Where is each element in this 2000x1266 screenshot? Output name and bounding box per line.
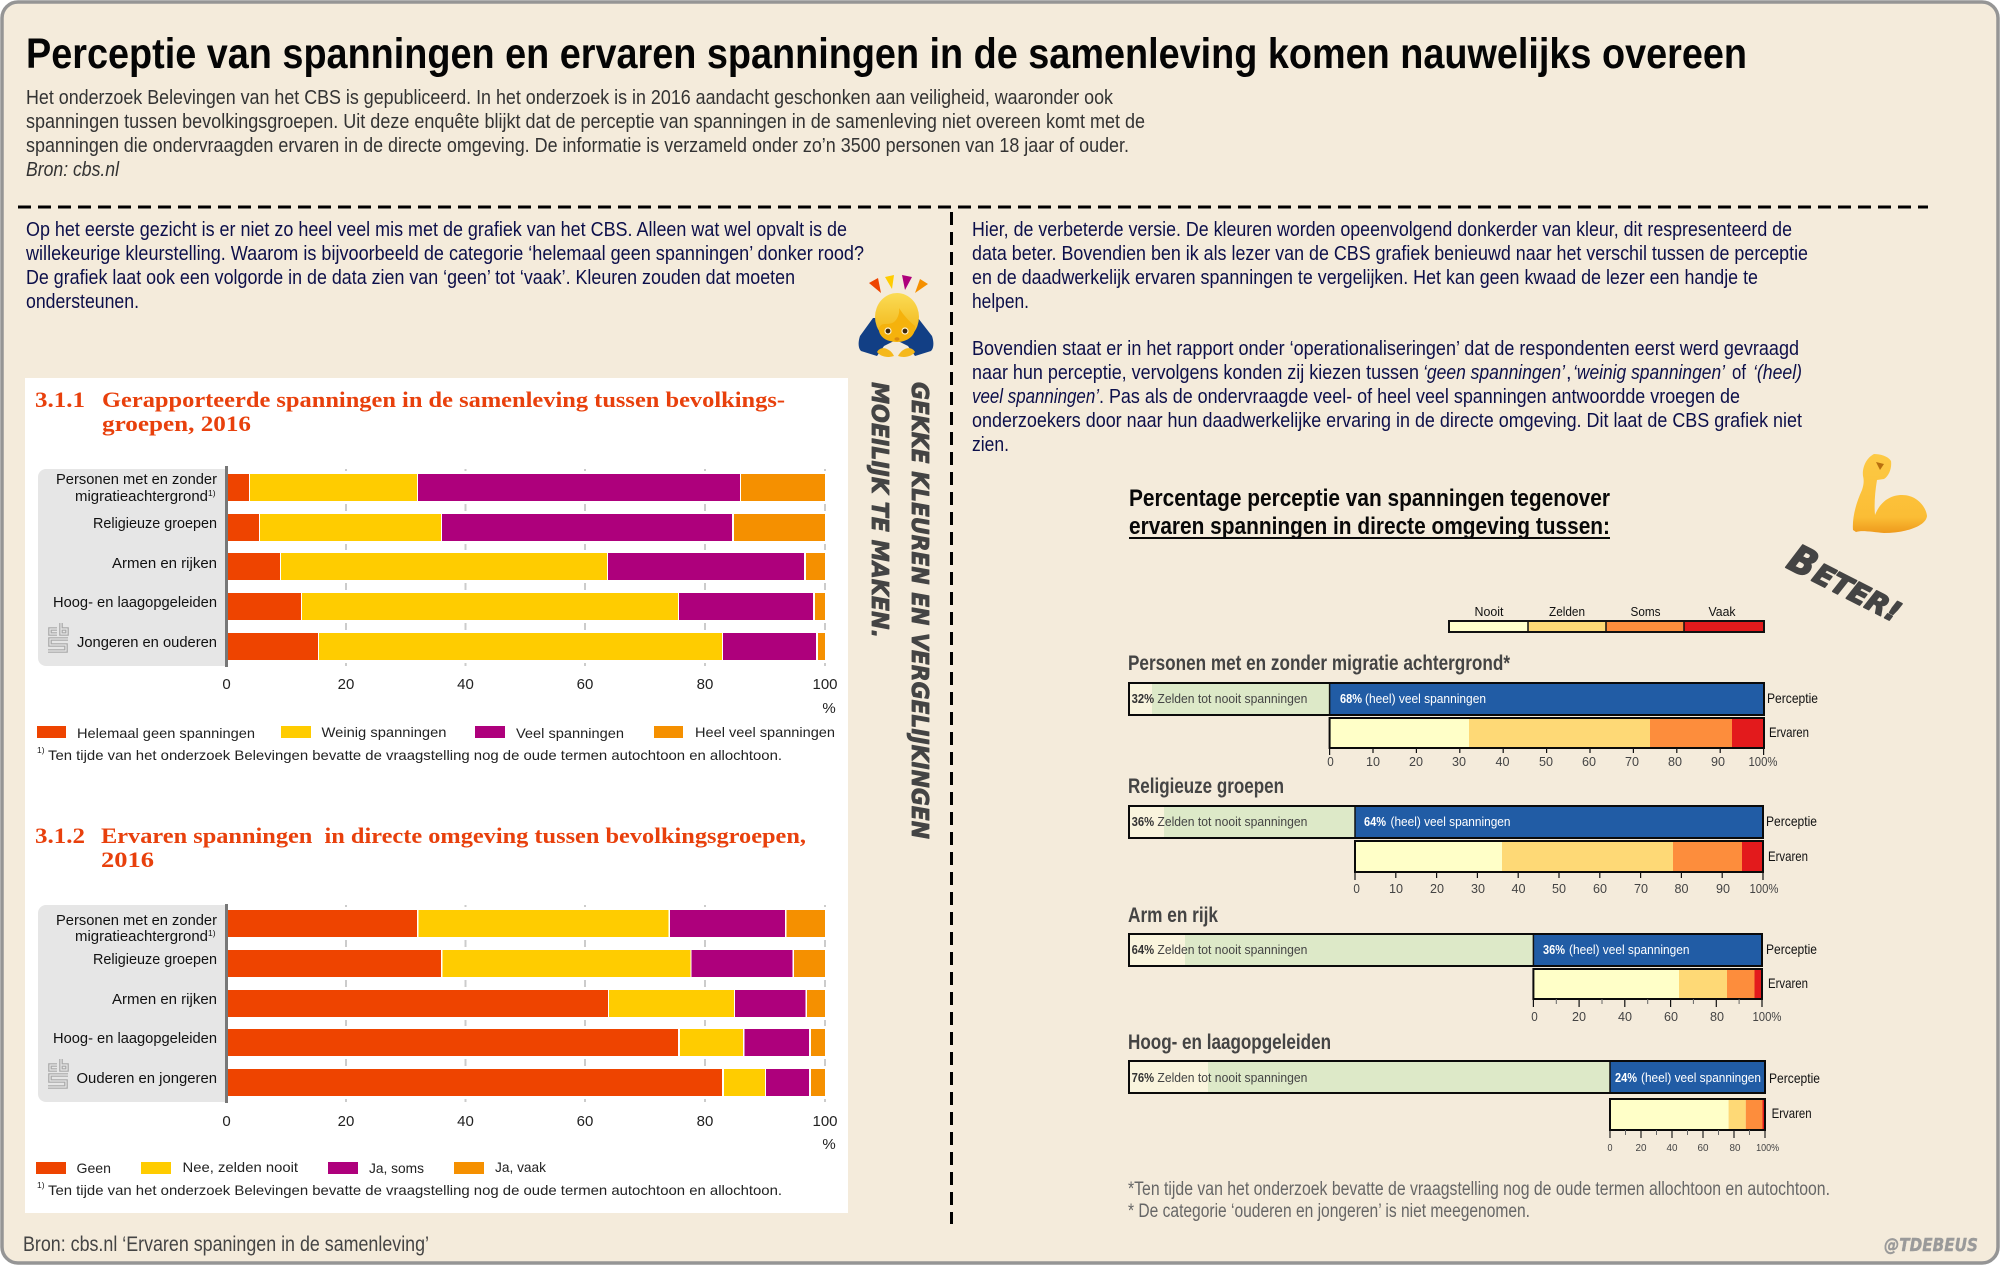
axis labels: 20: [338, 1113, 354, 1130]
perception bar: 36%: [1132, 814, 1154, 829]
legend: [36, 1159, 547, 1176]
axis: 0: [1327, 754, 1334, 769]
axis labels: 80: [697, 676, 713, 693]
axis: 100%: [1748, 754, 1778, 769]
handwritten note: Beter: ETER!: [1808, 557, 1906, 629]
perception bar: [1129, 1061, 1765, 1093]
category labels: Hoog- en laagopgeleiden: [53, 595, 217, 611]
legend: Weinig spanningen: [322, 724, 446, 740]
legend: Geen: [76, 1160, 111, 1176]
legend: Heel veel spanningen: [695, 724, 835, 740]
intro text block: Het onderzoek Belevingen van het CBS is gepubliceerd. In het onderzoek is in 2016 aandacht geschonken aan veiligheid, waaronder ook: [26, 87, 1114, 109]
axis: [1353, 872, 1779, 896]
section heading: Hoog- en laagopgeleiden: [1128, 1031, 1331, 1054]
panel: migratie achtergrond: [1128, 652, 1818, 769]
axis: 80: [1730, 1142, 1741, 1154]
heading 3.1.2: [35, 823, 806, 872]
footnote: 1): [37, 745, 45, 755]
panel: religieuze groepen: [1128, 775, 1817, 896]
left explanation text: [25, 219, 864, 313]
axis: 0: [1531, 1009, 1538, 1024]
axis labels: 60: [577, 676, 593, 693]
axis labels: 40: [457, 1113, 474, 1130]
category label panel: [38, 469, 226, 666]
experienced bar: [1533, 969, 1762, 999]
footnote: Ten tijde van het onderzoek Belevingen bevatte de vraagstelling nog de oude termen autochtoon en allochtoon.: [48, 747, 782, 763]
handwritten vertical note: MOEILIJK TE MAKEN.: [866, 382, 892, 638]
perception bar: [1129, 683, 1764, 715]
axis: 100%: [1752, 1009, 1782, 1024]
right explanation text: onderzoekers door naar hun daadwerkelijke ervaring in de directe omgeving. Dit laat de CBS grafiek niet: [972, 410, 1802, 432]
axis: 80: [1668, 754, 1682, 769]
axis: 60: [1582, 754, 1596, 769]
left explanation text: Op het eerste gezicht is er niet zo heel veel mis met de grafiek van het CBS. Alleen wat wel opvalt is de: [26, 219, 847, 241]
axis: 30: [1452, 754, 1466, 769]
perception bar: 36%: [1543, 942, 1565, 957]
experienced bar: [1610, 1099, 1765, 1130]
right explanation text: . Pas als de ondervraagde veel- of heel veel spanningen antwoordde vroegen de: [1099, 386, 1740, 408]
axis labels: 100: [812, 1113, 838, 1130]
category labels: 1): [208, 488, 216, 498]
axis labels: %: [822, 1136, 836, 1153]
axis labels: [222, 676, 838, 717]
axis: 60: [1593, 881, 1607, 896]
label: Ervaren: Ervaren: [1769, 724, 1809, 740]
intro text block: spanningen die ondervraagden ervaren in de directe omgeving. De informatie is verzameld onder zo’n 3500 personen van 18 jaar of ouder.: [26, 135, 1129, 157]
label: Ervaren: Ervaren: [1768, 975, 1808, 991]
axis: [1608, 1130, 1779, 1154]
category labels: [53, 472, 217, 651]
right explanation text: of: [1732, 362, 1746, 384]
colour legend: Vaak: [1708, 604, 1736, 619]
axis: 0: [1608, 1142, 1613, 1154]
axis: 20: [1572, 1009, 1586, 1024]
heading 3.1.1: 3.1.1: [35, 387, 85, 412]
category labels: Religieuze groepen: [93, 516, 217, 532]
axis labels: %: [822, 700, 836, 717]
label: Perceptie: Perceptie: [1767, 690, 1818, 706]
left explanation text: willekeurige kleurstelling. Waarom is bijvoorbeeld de categorie ‘helemaal geen spanningen’ donker rood?: [25, 243, 864, 265]
perception bar: 32%: [1132, 691, 1154, 706]
right explanation text: ‘geen spanningen’: [1423, 362, 1565, 384]
category labels: migratieachtergrond: [75, 929, 208, 945]
handwritten note: Beter: B: [1781, 536, 1825, 587]
axis: 90: [1711, 754, 1725, 769]
axis: 100%: [1756, 1142, 1779, 1154]
right explanation text: Hier, de verbeterde versie. De kleuren worden opeenvolgend donkerder van kleur, dit respresenteerd de: [972, 219, 1792, 241]
handwritten vertical note: GEKKE KLEUREN EN VERGELIJKINGEN: [906, 382, 932, 839]
axis: 40: [1496, 754, 1510, 769]
axis labels: 20: [338, 676, 354, 693]
axis labels: 80: [697, 1113, 713, 1130]
category labels: Hoog- en laagopgeleiden: [53, 1031, 217, 1047]
right explanation text: Bovendien staat er in het rapport onder ‘operationaliseringen’ dat de respondenten eerst werd gevraagd: [972, 338, 1799, 360]
stacked bars: [227, 907, 827, 1099]
axis: 20: [1636, 1142, 1647, 1154]
perception bar: [1129, 934, 1762, 966]
category labels: Ouderen en jongeren: [76, 1071, 217, 1087]
axis labels: 0: [222, 1113, 231, 1130]
handwritten note: Beter: [1781, 536, 1910, 631]
colour legend: Soms: [1630, 604, 1661, 619]
axis: 10: [1389, 881, 1403, 896]
chart heading: ervaren spanningen in directe omgeving tussen:: [1129, 513, 1610, 540]
heading 3.1.1: groepen, 2016: [102, 411, 251, 436]
stacked bars: [227, 471, 827, 663]
section heading: Arm en rijk: [1128, 904, 1218, 927]
label: Perceptie: Perceptie: [1766, 813, 1817, 829]
right explanation text: zien.: [972, 434, 1009, 456]
legend: [37, 724, 835, 741]
heading 3.1.2: 3.1.2: [35, 823, 85, 848]
signature: @TDEBEUS: [1884, 1235, 1978, 1256]
category labels: Personen met en zonder: [56, 913, 217, 929]
perception bar: (heel) veel spanningen: [1641, 1070, 1761, 1085]
colour legend: [1449, 604, 1764, 632]
axis labels: [222, 1113, 838, 1153]
right explanation text: ‘weinig spanningen’: [1573, 362, 1725, 384]
intro text block: [26, 87, 1145, 181]
axis: 20: [1430, 881, 1444, 896]
legend: Ja, vaak: [495, 1159, 547, 1175]
handwritten vertical note: [866, 382, 932, 839]
axis: 20: [1409, 754, 1423, 769]
panel: hoog- en laagopgeleiden: [1128, 1031, 1820, 1154]
axis: 40: [1666, 1142, 1678, 1154]
footnote: 1): [37, 1180, 45, 1190]
category labels: Religieuze groepen: [93, 952, 217, 968]
category labels: Armen en rijken: [112, 992, 217, 1008]
axis: 60: [1664, 1009, 1678, 1024]
axis labels: 100: [812, 676, 838, 693]
section heading: Personen met en zonder migratie achtergrond*: [1128, 652, 1511, 675]
axis: 40: [1512, 881, 1526, 896]
perception bar: (heel) veel spanningen: [1569, 942, 1690, 957]
icon: CBS logo: [48, 623, 68, 651]
icon: flexed biceps emoji: [1853, 454, 1927, 533]
axis: 30: [1471, 881, 1485, 896]
colour legend: Zelden: [1549, 604, 1585, 619]
category labels: 1): [208, 928, 216, 938]
footnotes: *Ten tijde van het onderzoek bevatte de vraagstelling nog de oude termen allochtoon en autochtoon.: [1128, 1179, 1830, 1200]
label: Ervaren: Ervaren: [1768, 848, 1808, 864]
label: Ervaren: Ervaren: [1772, 1105, 1812, 1121]
right explanation text: [972, 219, 1808, 456]
chart 3.1.1: [35, 387, 838, 763]
axis labels: 40: [457, 676, 474, 693]
right explanation text: naar hun perceptie, vervolgens konden zij kiezen tussen: [972, 362, 1419, 384]
panel: CBS charts: [25, 378, 848, 1213]
axis: 40: [1618, 1009, 1632, 1024]
perception bar: (heel) veel spanningen: [1390, 814, 1510, 829]
experienced bar: [1355, 841, 1763, 872]
legend: Helemaal geen spanningen: [77, 725, 255, 741]
title: Perceptie van spanningen en ervaren spanningen in de samenleving komen nauwelijks overeen: [26, 30, 1747, 78]
axis labels: 0: [222, 676, 231, 693]
panel: arm en rijk: [1128, 904, 1817, 1024]
perception bar: 76%: [1132, 1070, 1154, 1085]
right explanation text: ,: [1566, 362, 1572, 384]
icon: bowing person emoji: [859, 275, 933, 357]
legend: Nee, zelden nooit: [182, 1159, 298, 1175]
category labels: Jongeren en ouderen: [77, 635, 217, 651]
axis: 0: [1353, 881, 1360, 896]
axis labels: 60: [577, 1113, 593, 1130]
right explanation text: veel spanningen’: [972, 386, 1099, 408]
source note: Bron: cbs.nl ‘Ervaren spaningen in de samenleving’: [23, 1233, 429, 1256]
perception bar: Zelden tot nooit spanningen: [1157, 814, 1307, 829]
axis: 80: [1710, 1009, 1724, 1024]
axis: 70: [1634, 881, 1648, 896]
category label panel: [38, 905, 226, 1102]
chart heading: Percentage perceptie van spanningen tegenover: [1129, 485, 1610, 512]
perception bar: (heel) veel spanningen: [1365, 691, 1486, 706]
axis: 10: [1366, 754, 1380, 769]
icon: CBS logo: [48, 1059, 68, 1087]
footnotes: * De categorie ‘ouderen en jongeren’ is niet meegenomen.: [1128, 1201, 1530, 1222]
right explanation text: ‘(heel): [1753, 362, 1802, 384]
perception bar: Zelden tot nooit spanningen: [1157, 1070, 1307, 1085]
legend: Veel spanningen: [516, 725, 624, 741]
axis: 80: [1674, 881, 1688, 896]
axis: 70: [1625, 754, 1639, 769]
perception bar: 64%: [1364, 814, 1386, 829]
right explanation text: helpen.: [972, 291, 1029, 313]
category labels: Personen met en zonder: [56, 472, 217, 488]
category labels: migratieachtergrond: [75, 489, 208, 505]
footnote: Ten tijde van het onderzoek Belevingen bevatte de vraagstelling nog de oude termen autochtoon en allochtoon.: [48, 1182, 782, 1198]
heading 3.1.1: [35, 387, 785, 436]
section heading: Religieuze groepen: [1128, 775, 1284, 798]
legend: Ja, soms: [369, 1160, 424, 1176]
intro text block: Bron: cbs.nl: [26, 159, 119, 181]
category labels: [53, 913, 217, 1087]
label: Perceptie: Perceptie: [1769, 1070, 1820, 1086]
intro text block: spanningen tussen bevolkingsgroepen. Uit deze enquête blijkt dat de perceptie van spanningen in de samenleving niet overeen komt met de: [26, 111, 1145, 133]
axis: [1531, 999, 1782, 1024]
heading 3.1.2: 2016: [101, 847, 154, 872]
axis: 50: [1539, 754, 1553, 769]
chart heading: [1129, 485, 1610, 540]
perception bar: 68%: [1340, 691, 1362, 706]
left explanation text: ondersteunen.: [26, 291, 139, 313]
perception bar: Zelden tot nooit spanningen: [1157, 691, 1307, 706]
label: Perceptie: Perceptie: [1766, 941, 1817, 957]
experienced bar: [1330, 718, 1764, 748]
right explanation text: data beter. Bovendien ben ik als lezer van de CBS grafiek benieuwd naar het verschil tussen de perceptie: [972, 243, 1808, 265]
axis: 50: [1552, 881, 1566, 896]
axis: 60: [1698, 1142, 1709, 1154]
axis: [1327, 748, 1778, 769]
category labels: Armen en rijken: [112, 556, 217, 572]
heading 3.1.2: Ervaren spanningen in directe omgeving tussen bevolkingsgroepen,: [101, 823, 806, 848]
left explanation text: De grafiek laat ook een volgorde in de data zien van ‘geen’ tot ‘vaak’. Kleuren zouden dat moeten: [26, 267, 795, 289]
axis: 100%: [1750, 881, 1779, 896]
colour legend: Nooit: [1474, 604, 1504, 619]
footnotes: [1128, 1179, 1830, 1222]
perception bar: 24%: [1615, 1070, 1637, 1085]
heading 3.1.1: Gerapporteerde spanningen in de samenleving tussen bevolkings-: [102, 387, 785, 412]
axis: 90: [1716, 881, 1730, 896]
perception bar: Zelden tot nooit spanningen: [1157, 942, 1307, 957]
chart 3.1.2: [35, 823, 838, 1198]
right explanation text: en de daadwerkelijk ervaren spanningen te vergelijken. Het kan geen kwaad de lezer een handje te: [972, 267, 1758, 289]
perception bar: 64%: [1132, 942, 1154, 957]
perception bar: [1129, 806, 1763, 838]
